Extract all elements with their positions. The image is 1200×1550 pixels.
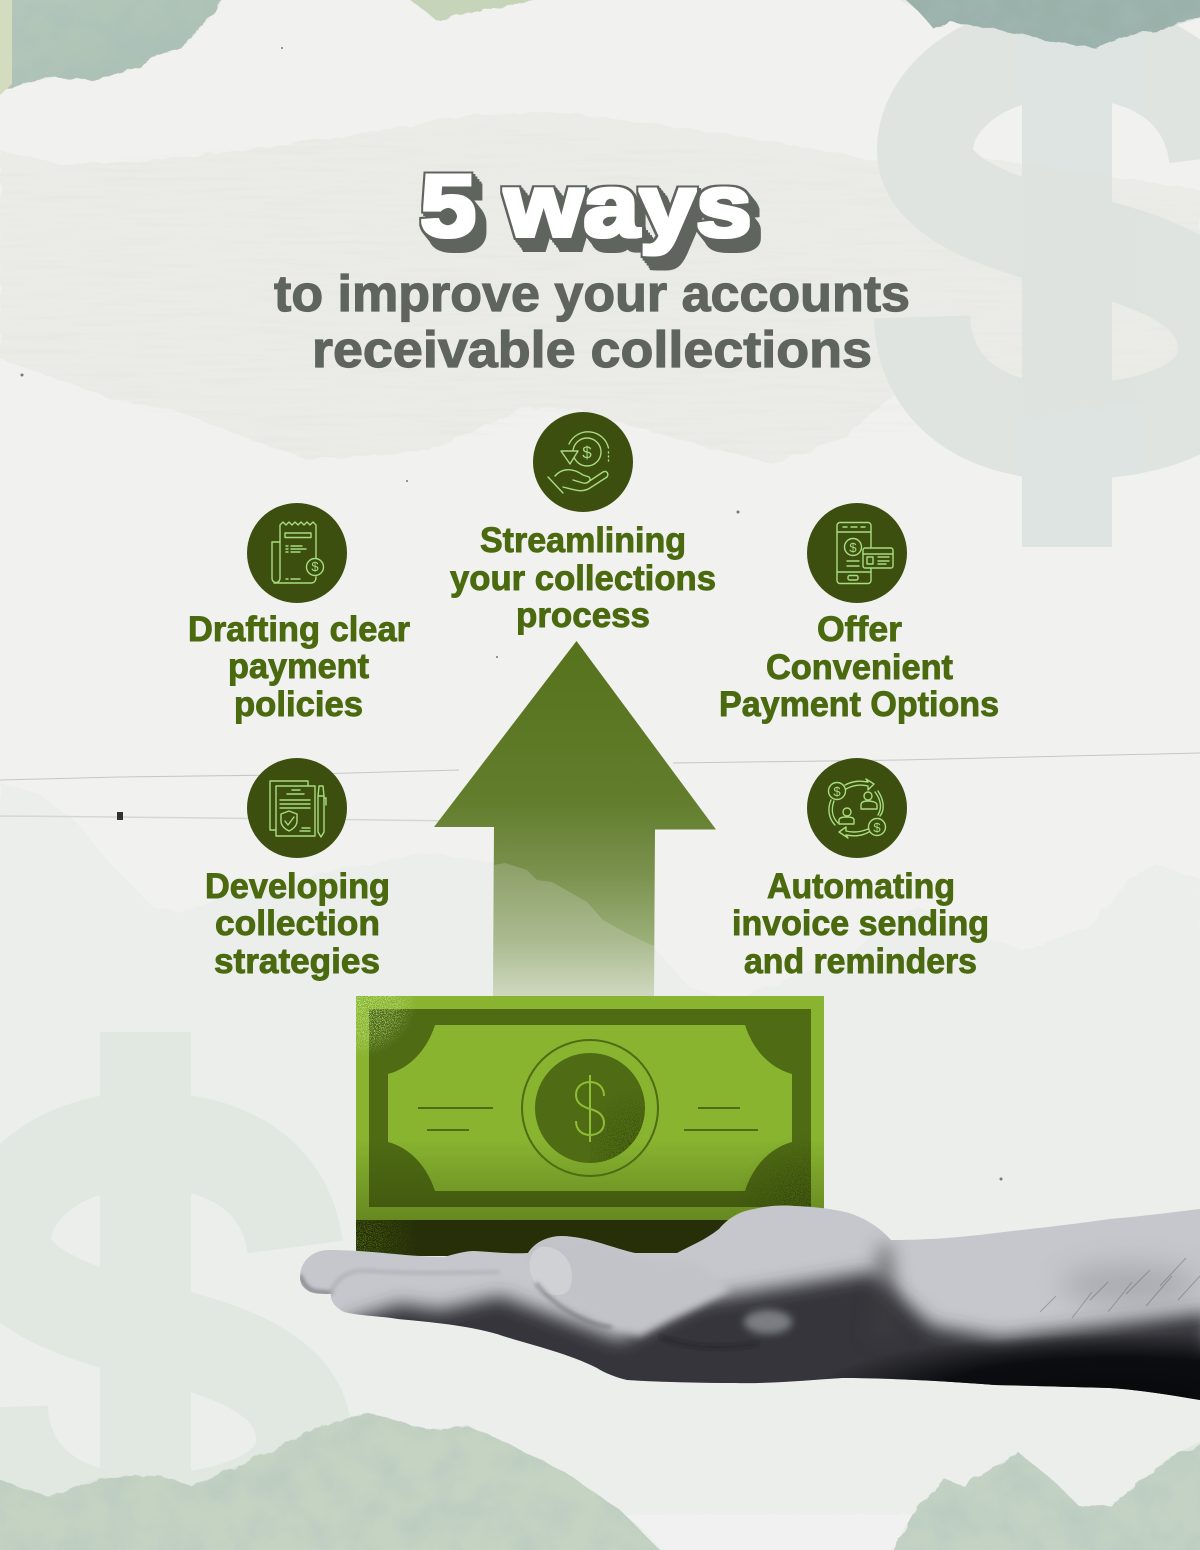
icon: phone and card	[807, 503, 907, 603]
label: Offer	[817, 610, 902, 649]
hand: hair on the arm	[1040, 1258, 1200, 1318]
label: payment	[228, 647, 369, 686]
label	[450, 521, 716, 635]
step: streamlining your collections process	[450, 412, 716, 635]
bill: light centre panel	[388, 1025, 792, 1191]
label	[719, 610, 999, 724]
label: invoice sending	[732, 904, 989, 943]
background: torn green paper top left	[0, 0, 226, 95]
background: large dollar sign top right	[922, 0, 1200, 547]
icon: phone and card: $	[849, 540, 857, 555]
label	[205, 867, 390, 981]
subtitle: receivable collections	[312, 321, 872, 378]
subtitle	[274, 265, 910, 378]
step: automating invoice sending and reminders	[732, 758, 989, 981]
hand: thumb	[528, 1235, 792, 1347]
step: offer convenient payment options	[719, 503, 999, 724]
background: torn green paper bottom right	[888, 1442, 1200, 1550]
hand: shaded palm and wrist	[341, 1236, 1200, 1400]
icon: hand with dollar refresh: $	[582, 443, 592, 462]
label	[188, 610, 410, 724]
hand: finger separation	[331, 1270, 500, 1294]
bill: medallion	[522, 1040, 658, 1176]
illustration: dollar bill	[356, 996, 824, 1256]
icon: cycle of payment between people: $	[833, 784, 841, 799]
background: torn green paper bottom left	[0, 1412, 670, 1550]
title	[274, 156, 910, 378]
label: strategies	[214, 942, 380, 981]
label: and reminders	[744, 942, 977, 981]
label: Automating	[767, 867, 955, 906]
label: process	[516, 596, 650, 635]
bill: engraved lines	[418, 1108, 758, 1130]
illustration: open hand	[300, 1206, 1200, 1400]
icon: receipt: $	[311, 559, 319, 574]
title: 5 ways: 5 ways	[420, 156, 752, 255]
background: large dollar sign bottom left	[0, 1032, 304, 1550]
background: torn green paper top centre	[398, 0, 559, 20]
arrow	[434, 641, 716, 996]
icon: hand with dollar refresh	[533, 412, 633, 512]
label: your collections	[450, 559, 716, 598]
label: Payment Options	[719, 685, 999, 724]
step: drafting clear payment policies	[188, 503, 410, 724]
icon: cycle of payment between people	[807, 758, 907, 858]
icon: document, shield and pen	[247, 758, 347, 858]
label: Streamlining	[480, 521, 686, 560]
background: lower pale torn layer	[0, 783, 1200, 1515]
background: paper creases and specks	[0, 47, 1200, 1180]
background: darker torn paper band	[0, 112, 1200, 464]
label	[732, 867, 989, 981]
background: torn green paper top right	[895, 0, 1200, 48]
label: policies	[234, 685, 363, 724]
label: Convenient	[766, 648, 953, 687]
icon: receipt	[247, 503, 347, 603]
label: collection	[215, 904, 380, 943]
step: developing collection strategies	[205, 758, 390, 981]
label: Drafting clear	[188, 610, 410, 649]
subtitle: to improve your accounts	[274, 265, 910, 322]
icon: cycle of payment between people: $	[873, 820, 881, 835]
label: Developing	[205, 867, 390, 906]
